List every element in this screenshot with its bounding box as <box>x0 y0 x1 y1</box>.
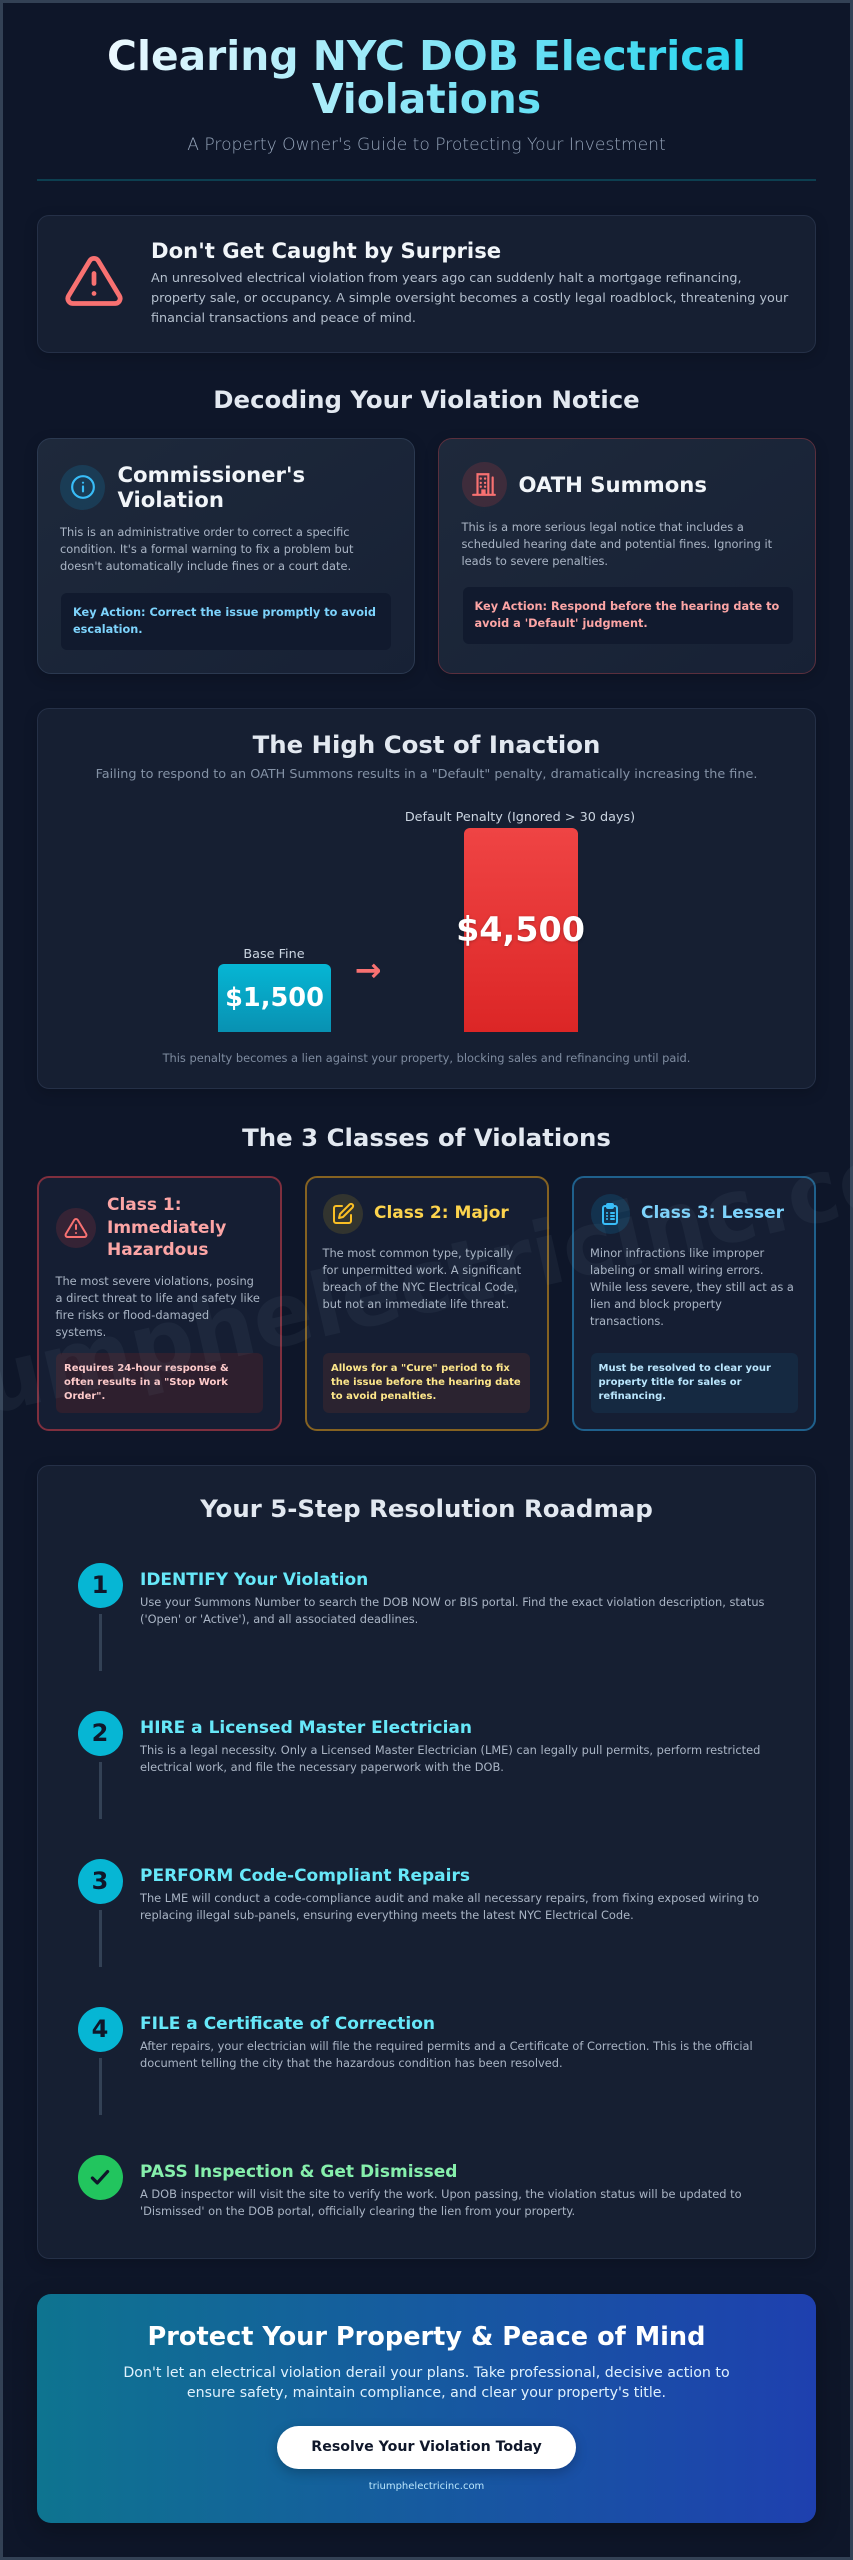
step 4 text: document telling the city that the hazardous condition has been resolved. <box>140 2056 563 2070</box>
CTA text: Don't let an electrical violation derail your plans. Take professional, decisive action to <box>123 2365 730 2381</box>
subtitle: A Property Owner's Guide to Protecting Your Investment <box>187 134 666 154</box>
panel: class 1 <box>37 1176 282 1431</box>
step 5 text: A DOB inspector will visit the site to verify the work. Upon passing, the violation status will be updated to <box>140 2186 742 2200</box>
step 1 text <box>140 1594 764 1626</box>
step 3 text <box>140 1890 759 1922</box>
step 1 number: 1 <box>92 1571 108 1599</box>
class 3 note text <box>598 1362 771 1402</box>
value: 1500: $1,500 <box>225 983 324 1013</box>
class 2 text: breach of the NYC Electrical Code, <box>322 1280 517 1294</box>
step 5 text <box>140 2186 742 2218</box>
step 1 number <box>78 1562 122 1608</box>
step 4 title: FILE a Certificate of Correction <box>140 2014 435 2034</box>
card text: scheduled hearing date and potential fines. Ignoring it <box>462 536 772 550</box>
card title <box>118 462 305 512</box>
class 2 note <box>323 1353 530 1413</box>
icon: class 3 clipboard <box>590 1194 630 1234</box>
step 5 check icon <box>78 2154 122 2200</box>
step 5 title: PASS Inspection & Get Dismissed <box>140 2162 457 2182</box>
class 1 title: Hazardous <box>107 1240 209 1260</box>
panel: class 3 <box>572 1176 816 1431</box>
card text <box>60 525 354 573</box>
cost footnote: This penalty becomes a lien against your property, blocking sales and refinancing until paid. <box>163 1051 690 1065</box>
card title: Violation <box>118 487 224 512</box>
bar: base fine <box>218 964 331 1032</box>
class 1 title: Class 1: <box>107 1195 182 1215</box>
class 3 title: Class 3: Lesser <box>641 1203 784 1223</box>
step 3 text: replacing illegal sub-panels, ensuring everything meets the latest NYC Electrical Code. <box>140 1908 634 1922</box>
value: 4500: $4,500 <box>456 910 585 949</box>
class 3 text: transactions. <box>590 1314 664 1328</box>
step 1 text: Use your Summons Number to search the DOB NOW or BIS portal. Find the exact violation description, status <box>140 1594 764 1608</box>
heading: decoding: Decoding Your Violation Notice <box>213 385 640 414</box>
step 3 number: 3 <box>92 1867 108 1895</box>
panel: OATH summons <box>438 438 816 674</box>
class 1 text: a direct threat to life and safety like <box>56 1291 260 1305</box>
icon: building <box>462 462 506 506</box>
icon: warning triangle <box>65 256 123 306</box>
alert text <box>151 271 788 326</box>
class 1 title <box>107 1195 226 1260</box>
card text: condition. It's a formal warning to fix a problem but <box>60 542 353 556</box>
panel: class 2 <box>304 1176 548 1431</box>
step 2 text: This is a legal necessity. Only a Licensed Master Electrician (LME) can legally pull permits, perform restricted <box>140 1742 760 1756</box>
step 3 title: PERFORM Code-Compliant Repairs <box>140 1866 470 1886</box>
class 3 text: Minor infractions like improper <box>590 1246 764 1260</box>
cost subtitle: Failing to respond to an OATH Summons results in a "Default" penalty, dramatically increasing the fine. <box>96 767 757 782</box>
class 3 note text: Must be resolved to clear your <box>598 1362 771 1374</box>
panel: high cost of inaction <box>37 708 816 1089</box>
card text: This is an administrative order to correct a specific <box>60 525 350 539</box>
alert heading: Don't Get Caught by Surprise <box>151 238 501 262</box>
key action: avoid a 'Default' judgment. <box>474 617 648 630</box>
step 3 number <box>78 1858 122 1904</box>
roadmap heading: Your 5-Step Resolution Roadmap <box>200 1494 653 1523</box>
class 1 note text <box>64 1362 229 1402</box>
step 2 text: electrical work, and file the necessary paperwork with the DOB. <box>140 1760 504 1774</box>
key action: escalation. <box>73 622 143 636</box>
arrow: → <box>355 951 381 989</box>
class 3 text: labeling or small wiring errors. <box>590 1262 764 1276</box>
panel: roadmap <box>37 1465 816 2259</box>
heading: classes: The 3 Classes of Violations <box>242 1123 611 1152</box>
class 1 text: The most severe violations, posing <box>56 1274 254 1288</box>
step 2 text <box>140 1742 760 1774</box>
step 1 text: ('Open' or 'Active'), and all associated deadlines. <box>140 1612 418 1626</box>
class 1 note <box>56 1353 263 1413</box>
class 1 text: systems. <box>56 1325 106 1339</box>
class 3 text: lien and block property <box>590 1296 722 1310</box>
CTA button: Resolve Your Violation Today <box>311 2439 542 2455</box>
key action: Key Action: Respond before the hearing date to <box>474 600 779 613</box>
class 2 text: The most common type, typically <box>322 1246 513 1260</box>
class 3 text: While less severe, they still act as a <box>590 1280 794 1294</box>
step 4 text <box>140 2038 753 2070</box>
key action: Key Action: Correct the issue promptly to avoid <box>73 606 376 618</box>
class 3 note <box>590 1353 798 1413</box>
class 2 note text <box>331 1362 521 1402</box>
step 4 text: After repairs, your electrician will file the required permits and a Certificate of Correction. This is the official <box>140 2038 753 2052</box>
class 3 text <box>590 1246 794 1328</box>
class 1 note text: Order". <box>64 1391 105 1402</box>
step 3 text: The LME will conduct a code-compliance audit and make all necessary repairs, from fixing exposed wiring to <box>140 1890 759 1904</box>
icon: info <box>60 464 105 510</box>
alert text: property sale, or occupancy. A simple oversight becomes a costly legal roadblock, threatening your <box>151 291 788 306</box>
cost heading: The High Cost of Inaction <box>253 730 600 759</box>
icon: class 2 edit <box>323 1194 362 1234</box>
panel: alert <box>37 214 816 352</box>
class 2 note text: Allows for a "Cure" period to fix <box>331 1362 510 1374</box>
step 5 text: 'Dismissed' on the DOB portal, officially clearing the lien from your property. <box>140 2204 575 2218</box>
bar chart <box>218 810 635 1032</box>
CTA text: ensure safety, maintain compliance, and clear your property's title. <box>187 2385 666 2401</box>
card title: OATH Summons <box>518 472 707 496</box>
class 1 title: Immediately <box>107 1218 226 1238</box>
title <box>37 35 816 122</box>
card title: Commissioner's <box>118 462 305 487</box>
class 2 note text: the issue before the hearing date <box>331 1377 521 1388</box>
class 2 note text: to avoid penalties. <box>331 1391 436 1402</box>
bar: default penalty <box>464 828 578 1032</box>
step 2 number: 2 <box>92 1719 108 1747</box>
card text: This is a more serious legal notice that includes a <box>462 520 744 534</box>
bar label: base: Base Fine <box>243 946 305 962</box>
step 4 number: 4 <box>92 2015 108 2043</box>
class 3 note text: refinancing. <box>598 1391 666 1402</box>
panel: commissioner's violation <box>37 438 415 674</box>
class 1 text: fire risks or flood-damaged <box>56 1308 209 1322</box>
class 2 text <box>322 1246 521 1310</box>
class 1 text <box>55 1274 260 1339</box>
CTA heading: Protect Your Property & Peace of Mind <box>148 2322 705 2352</box>
step 4 number <box>78 2006 122 2052</box>
website: triumphelectricinc.com <box>369 2481 484 2492</box>
panel: call to action <box>37 2294 816 2523</box>
alert text: financial transactions and peace of mind. <box>151 311 416 326</box>
step 2 number <box>78 1710 122 1756</box>
title: Clearing NYC DOB Electrical <box>107 32 746 80</box>
CTA text <box>123 2365 730 2401</box>
step 1 title: IDENTIFY Your Violation <box>140 1570 368 1590</box>
class 2 title: Class 2: Major <box>374 1203 509 1223</box>
key action <box>61 592 391 650</box>
card text: leads to severe penalties. <box>462 554 608 568</box>
class 1 note text: often results in a "Stop Work <box>64 1377 228 1388</box>
class 2 text: for unpermitted work. A significant <box>322 1262 521 1276</box>
class 2 text: but not an immediate life threat. <box>322 1296 509 1310</box>
title: Violations <box>312 75 541 123</box>
step 2 title: HIRE a Licensed Master Electrician <box>140 1718 472 1738</box>
card text <box>461 520 772 568</box>
icon: class 1 warning <box>56 1208 96 1248</box>
class 3 note text: property title for sales or <box>598 1377 742 1388</box>
CTA button <box>277 2426 576 2468</box>
alert text: An unresolved electrical violation from years ago can suddenly halt a mortgage refinancing, <box>151 271 742 286</box>
class 1 note text: Requires 24-hour response & <box>64 1362 229 1374</box>
bar label: default: Default Penalty (Ignored > 30 days) <box>405 810 635 825</box>
key action <box>462 587 792 644</box>
card text: doesn't automatically include fines or a court date. <box>60 559 351 573</box>
